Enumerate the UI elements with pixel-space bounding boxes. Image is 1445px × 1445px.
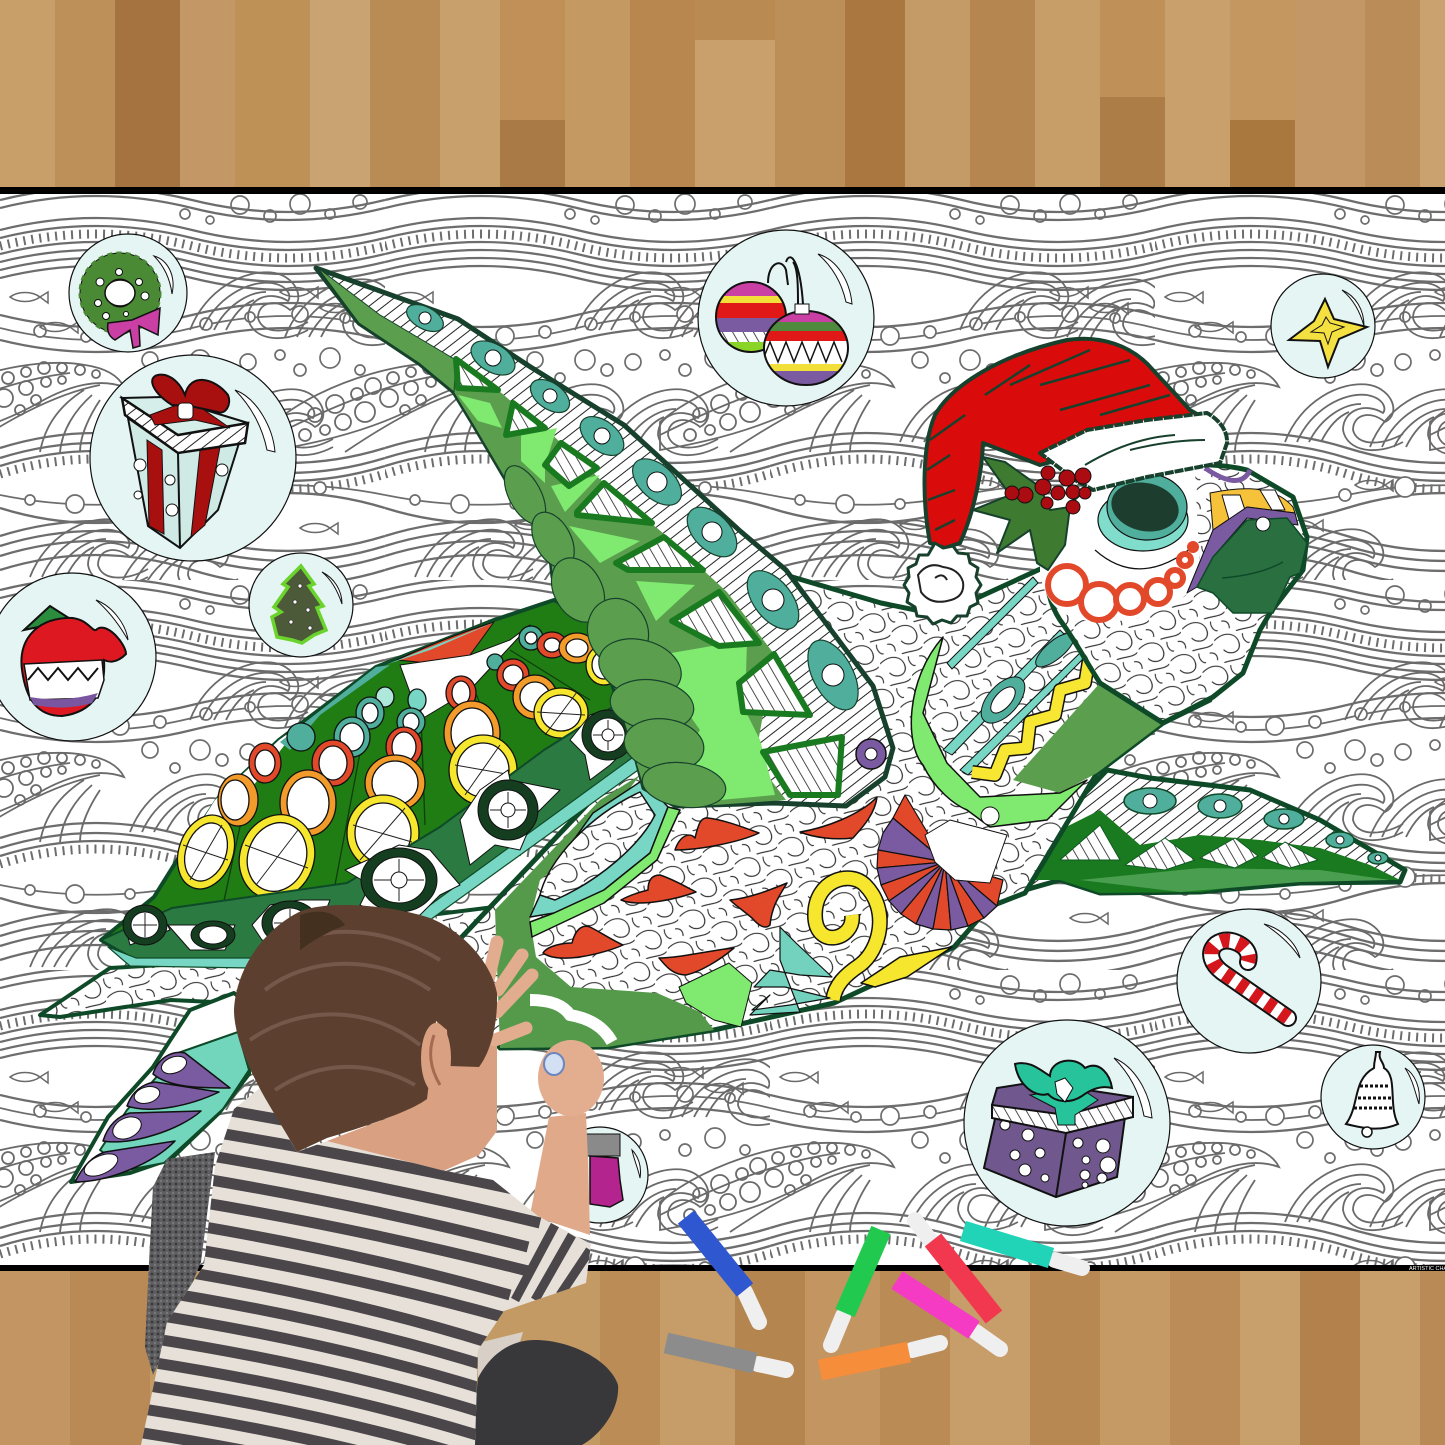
yellow swirl: [815, 878, 880, 1000]
flipper cells: [456, 359, 842, 795]
wheel spokes: [183, 692, 585, 885]
rear flipper left: [71, 993, 255, 1182]
markers: [666, 1217, 1082, 1370]
bubble: mitten: [0, 573, 156, 741]
teal marker: [963, 1231, 1082, 1268]
left ornament: [716, 282, 786, 354]
flipper lobes: [496, 459, 729, 813]
arm and hand: [530, 1040, 604, 1235]
hair: [234, 905, 497, 1152]
bubble: gift with red ribbon: [90, 355, 296, 561]
bubble: wreath: [69, 234, 187, 352]
holly and berries: [973, 457, 1091, 570]
bubble: tree: [249, 553, 353, 657]
neck: [911, 577, 1173, 827]
hearts: [543, 797, 877, 975]
red marker: [915, 1220, 994, 1317]
teal eye marks: [402, 299, 868, 718]
santa hat: [904, 339, 1227, 624]
orange marker: [820, 1343, 940, 1370]
big front flipper: [316, 268, 893, 813]
dark wheels: [123, 710, 640, 950]
right flipper: [1025, 770, 1405, 893]
teal crescent: [530, 780, 668, 917]
pink marker: [897, 1280, 1000, 1349]
legs: [145, 1152, 618, 1445]
tail and underside: [40, 905, 510, 1017]
shell white wedge and rim: [397, 622, 494, 668]
light green patches: [458, 395, 775, 800]
shell: [101, 600, 645, 968]
sea turtle: [40, 268, 1405, 1182]
gray marker: [666, 1343, 786, 1370]
bubble: purple gift: [964, 1020, 1170, 1226]
bubble: candy cane: [1177, 909, 1321, 1053]
poster sheet: [0, 187, 1445, 1272]
bubble: sock behind the boy: [552, 1127, 648, 1223]
mid green band: [454, 359, 786, 806]
teal leaves: [750, 927, 832, 1015]
boy coloring: [130, 905, 618, 1445]
body: [440, 560, 1210, 1048]
dark lower band: [101, 696, 640, 960]
face and neck: [327, 942, 532, 1172]
scute arcs: [168, 626, 622, 910]
bubble: bell: [1321, 1045, 1425, 1149]
striped shirt: [130, 1088, 591, 1445]
head: [1040, 465, 1307, 723]
bubble: ornaments: [698, 230, 874, 406]
green belly: [495, 775, 714, 1048]
blue marker: [686, 1217, 759, 1322]
green marker: [831, 1230, 881, 1345]
ear: [421, 1023, 451, 1093]
fan: [877, 795, 1003, 930]
right ornament: [765, 312, 847, 384]
bubble: star: [1271, 274, 1375, 378]
